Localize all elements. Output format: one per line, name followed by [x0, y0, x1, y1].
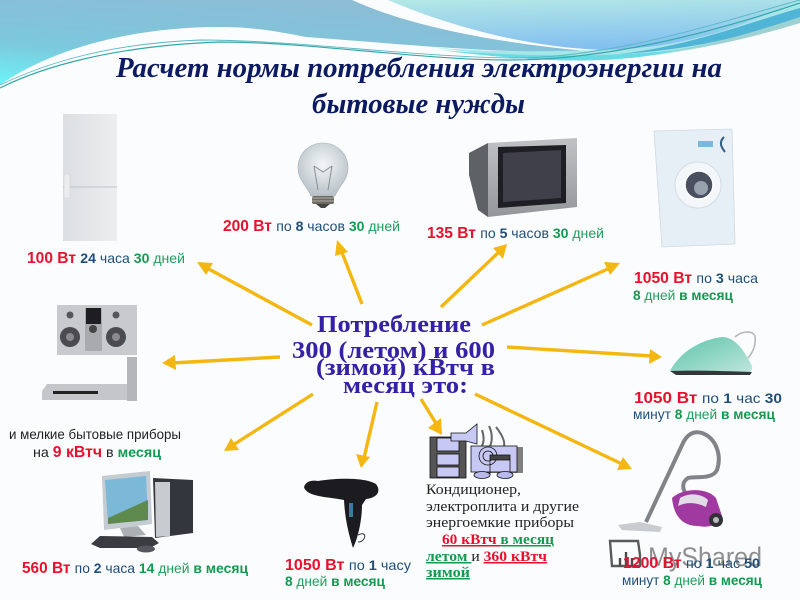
header wave decoration	[0, 0, 800, 88]
label: washing machine: 8 дней в месяц	[633, 287, 733, 303]
icon: television	[469, 138, 577, 217]
label: small appliances: на 9 кВтч в месяц	[33, 444, 161, 461]
icon: desktop computer	[91, 471, 193, 552]
label: washing machine	[633, 270, 758, 303]
label: small appliances	[9, 426, 181, 461]
watermark: MyShared: MyShared	[648, 542, 762, 572]
title: Расчет нормы потребления электроэнергии на	[115, 53, 722, 84]
central text: consumption: Потребление	[317, 312, 471, 338]
title: бытовые нужды	[312, 89, 525, 120]
label: vacuum cleaner	[622, 555, 762, 588]
central text: consumption: (зимой) кВтч в	[316, 355, 495, 381]
text: air conditioner and other energy-intensive appliances: Кондиционер,	[426, 482, 521, 498]
central text: consumption: месяц это:	[343, 373, 468, 399]
icon: light bulb	[298, 143, 348, 208]
watermark: MyShared	[610, 541, 762, 572]
label: vacuum cleaner: минут 8 дней в месяц	[622, 572, 762, 588]
label: small appliances: и мелкие бытовые приборы	[9, 426, 181, 442]
icon: stereo and DVD player	[42, 305, 137, 401]
label: iron: 1050 Вт по 1 час 30	[634, 390, 782, 407]
central text: consumption	[292, 312, 495, 399]
icon: washing machine	[654, 129, 735, 247]
text: air conditioner and other energy-intensive appliances: электроплита и другие	[426, 499, 579, 515]
label: light bulb: 200 Вт по 8 часов 30 дней	[223, 218, 400, 235]
label: television: 135 Вт по 5 часов 30 дней	[427, 225, 604, 242]
text: air conditioner and other energy-intensive appliances	[426, 482, 579, 581]
label: iron	[633, 390, 782, 422]
text: air conditioner and other energy-intensive appliances: энергоемкие приборы	[426, 515, 574, 531]
central text: consumption: 300 (летом) и 600	[292, 338, 495, 364]
label: hair dryer: 1050 Вт по 1 часу	[285, 557, 411, 574]
icon: hair dryer	[304, 479, 378, 548]
label: iron: минут 8 дней в месяц	[633, 406, 775, 422]
label: hair dryer	[285, 557, 411, 589]
icon: iron	[670, 332, 755, 375]
arrows	[162, 240, 662, 470]
text: air conditioner and other energy-intensive appliances: 60 кВтч в месяц	[442, 532, 554, 548]
title	[115, 53, 722, 120]
label: computer: 560 Вт по 2 часа 14 дней в месяц	[22, 560, 248, 577]
icon: refrigerator	[63, 114, 117, 241]
text: air conditioner and other energy-intensive appliances: зимой	[426, 565, 470, 581]
label: refrigerator: 100 Вт 24 часа 30 дней	[27, 250, 185, 267]
icon: clipart of energy-intensive appliances	[430, 424, 523, 478]
text: air conditioner and other energy-intensive appliances: летом и 360 кВтч	[426, 549, 548, 565]
label: hair dryer: 8 дней в месяц	[285, 573, 385, 589]
label: washing machine: 1050 Вт по 3 часа	[634, 270, 758, 287]
icon: vacuum cleaner	[618, 432, 723, 532]
label: vacuum cleaner: 1200 Вт по 1 час 50	[623, 555, 760, 572]
